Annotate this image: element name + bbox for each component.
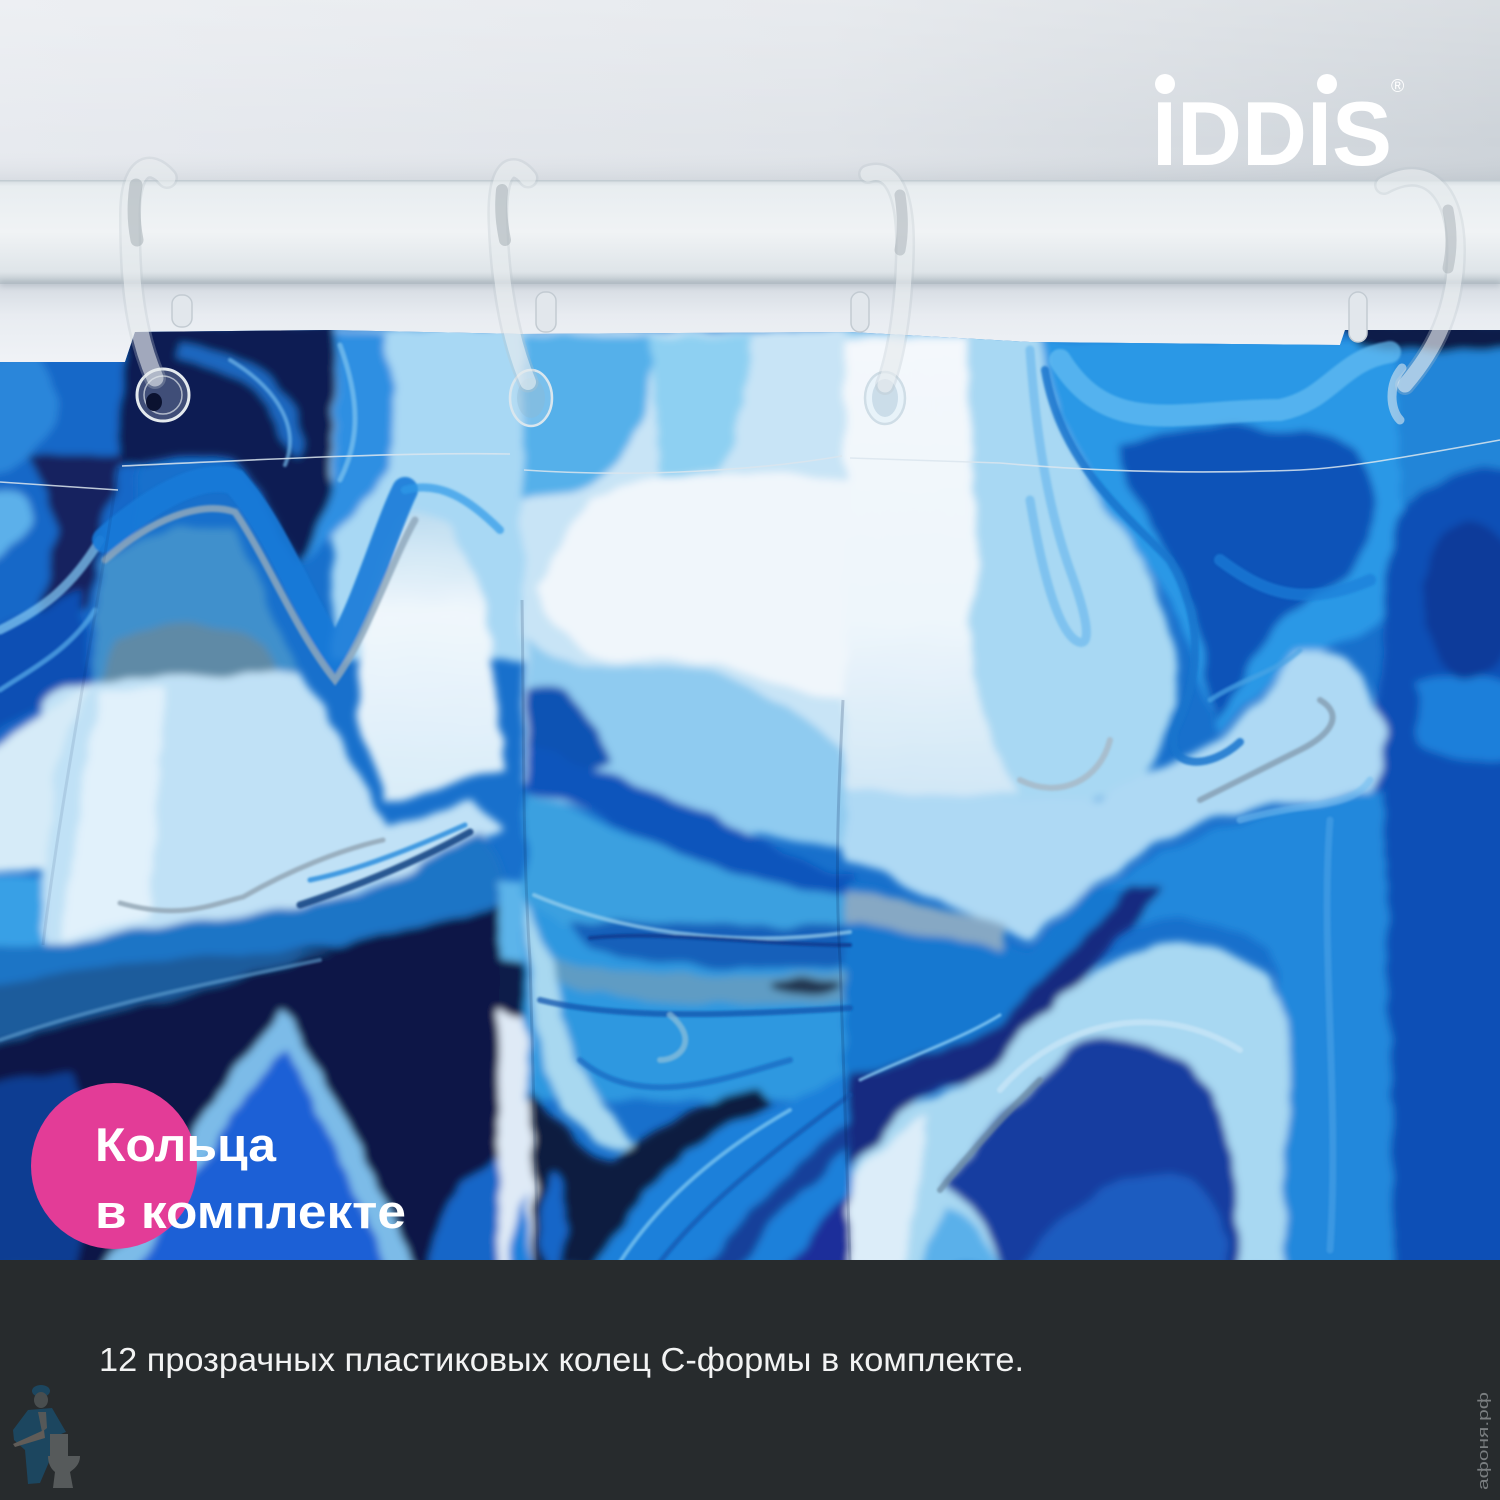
logo: iDDiS: ®	[1391, 76, 1404, 96]
eyelet of ring 1	[137, 369, 189, 421]
eyelet of ring 2	[510, 370, 552, 426]
callout heading: Кольца	[95, 1118, 277, 1171]
marble vein lines	[0, 345, 1390, 1262]
left panel	[0, 320, 135, 770]
right panel	[845, 330, 1176, 850]
eyelet of ring 3	[865, 372, 905, 424]
callout heading: в комплекте	[95, 1185, 406, 1238]
logo: iDDiS: IDDIS	[1152, 84, 1392, 185]
white strip between panels	[498, 1010, 536, 1268]
background wall behind the rod	[0, 0, 1500, 300]
eyelet of ring 4	[1392, 368, 1402, 420]
callout: pink circle	[31, 1083, 197, 1249]
callout heading	[95, 1118, 406, 1238]
curtain with blue marble print	[0, 320, 1500, 1270]
watermark: afonya.rf: афоня.рф	[1475, 1392, 1492, 1490]
dark panel	[0, 1260, 1500, 1500]
centre panel	[522, 330, 852, 780]
description text: 12 прозрачных пластиковых колец С-формы в комплекте.	[99, 1341, 1024, 1378]
shower ring 3	[865, 173, 905, 424]
icon: plumber with toilet	[13, 1385, 80, 1488]
curtain fold edges	[43, 468, 850, 1260]
shower ring 2	[498, 168, 552, 426]
hook slots in the fabric strip	[172, 292, 1367, 342]
fabric strip under the rod	[0, 284, 1500, 374]
hem stitching line	[0, 440, 1500, 490]
shower ring 4	[1384, 177, 1456, 420]
curtain rod	[0, 180, 1500, 286]
shower ring 1	[130, 168, 189, 421]
